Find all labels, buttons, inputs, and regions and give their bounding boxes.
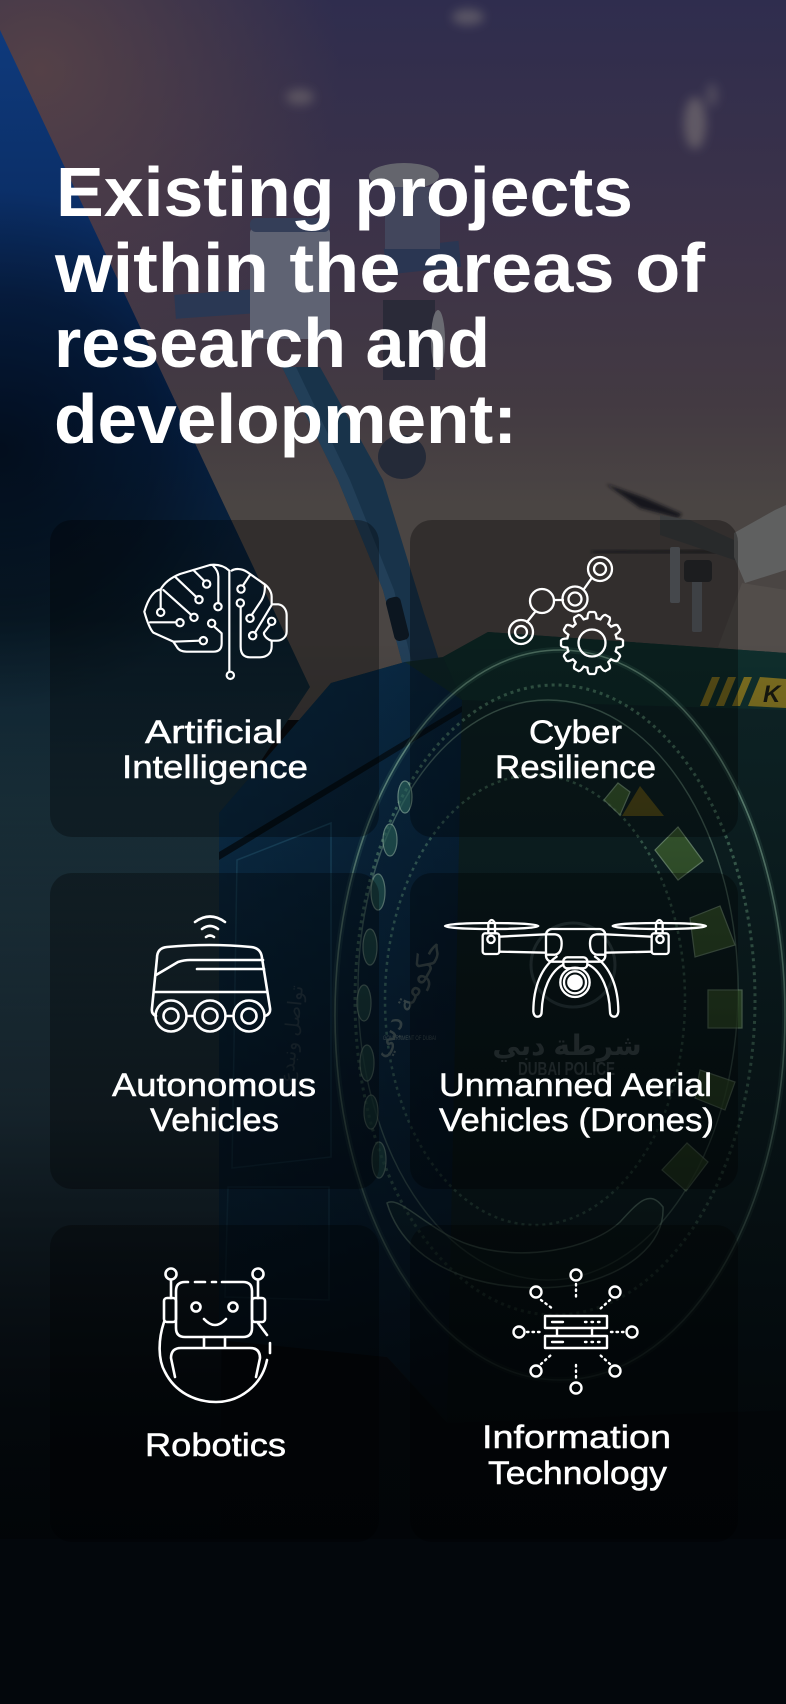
title: research and: [54, 304, 490, 382]
title: [54, 153, 706, 458]
icon: camera drone: [445, 920, 706, 1017]
label: Unmanned Aerial: [439, 1067, 712, 1103]
label: [122, 714, 308, 785]
icon: smiling robot: [160, 1268, 270, 1402]
label: Robotics: [145, 1427, 286, 1463]
door panels: [225, 823, 331, 1300]
icon: network and gear: [509, 557, 623, 674]
panel: robotics: [50, 1225, 379, 1542]
label: [495, 714, 656, 785]
label: Vehicles: [150, 1102, 279, 1138]
title: development:: [54, 380, 517, 458]
dubai police markings: تواصل ونبدع: [277, 984, 308, 1084]
panel: information technology: [410, 1225, 738, 1542]
dubai police markings: حكومة دبي: [362, 934, 451, 1062]
label: [112, 1067, 316, 1138]
blue structure wedge: [0, 30, 310, 1704]
teal ovals: [357, 781, 412, 1178]
hazard stripes: [700, 677, 786, 708]
label: Technology: [488, 1455, 667, 1491]
panel: autonomous vehicles: [50, 873, 379, 1189]
title: within the areas of: [54, 229, 706, 307]
sky: [0, 0, 786, 720]
label: Information: [482, 1419, 671, 1455]
clouds: [286, 9, 718, 149]
dubai police markings: GOVERNMENT OF DUBAI: [383, 1036, 436, 1042]
label: Resilience: [495, 749, 656, 785]
panel: artificial intelligence: [50, 520, 379, 837]
label: Intelligence: [122, 749, 308, 785]
machine box: [219, 632, 786, 1423]
machine box: K: [763, 681, 782, 708]
title: Existing projects: [56, 153, 633, 231]
dubai police markings: [277, 923, 642, 1084]
label: Cyber: [529, 714, 622, 750]
icon: circuit brain: [144, 565, 287, 679]
label: [439, 1067, 714, 1138]
dark bottom fade: [0, 640, 786, 1540]
panel: unmanned aerial vehicles: [410, 873, 738, 1189]
dubai police markings: DUBAI POLICE: [518, 1059, 615, 1079]
green squares: [604, 783, 742, 1191]
label: Autonomous: [112, 1067, 316, 1103]
icon: server network: [514, 1270, 638, 1394]
sensor mast: [174, 163, 488, 933]
glowing rings: [335, 650, 785, 1380]
panel: cyber resilience: [410, 520, 738, 837]
label: Artificial: [145, 714, 283, 750]
icon: autonomous robot vehicle: [152, 916, 270, 1032]
aerial drone in photo: [592, 484, 786, 660]
dubai police markings: شرطة دبي: [492, 1030, 642, 1062]
label: Vehicles (Drones): [439, 1102, 714, 1138]
label: [482, 1419, 671, 1491]
warning sign: [622, 786, 664, 816]
